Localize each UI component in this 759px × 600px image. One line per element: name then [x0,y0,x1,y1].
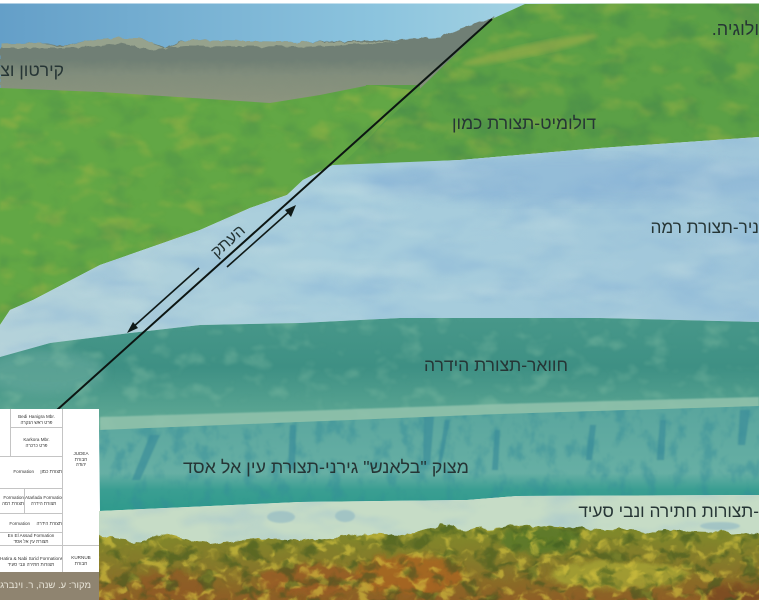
cell: formation 5 [0,556,62,566]
pale strip [100,397,759,432]
layer: marl band [0,315,759,435]
cell: formation 5: Hatira & Nabi Sa'id Formations [0,556,62,561]
cell: member 2 [23,437,50,448]
cell: age upper: חבורת [75,456,87,462]
cell: formation 2a: Formation [3,495,24,500]
label: dolomite formation: דולומיט-תצורת כמון [452,113,596,133]
cell: member 1: פרט ראש הנקרה [21,420,52,424]
layer: cliff band [99,404,759,514]
cell: formation 2b [25,495,62,506]
cell: age upper [73,451,89,467]
layer: pale lower band [99,495,759,544]
layer: green backing along the fault [345,85,420,170]
cell: formation 2a [2,495,24,506]
cell: formation 2a: תצורת רמה [2,500,24,506]
vegetation speckle [99,523,759,600]
arrow: up-right along fault [227,205,296,267]
cell: member 1 [18,414,55,425]
cell: formation 5: תצורות חתירה ונבי סעיד [8,562,54,566]
cell: member 2: Karkora Mbr. [23,437,50,442]
cell: age lower: חבורת [75,560,87,566]
cell: age upper: JUDEA [73,451,89,456]
cell: age lower [71,555,91,566]
label: lower formations: -תצורות חתירה ונבי סעיד [578,501,759,521]
blue spots on pale band [267,510,740,530]
cell: formation 4 [8,533,54,544]
arrow: down-left along fault [127,268,199,333]
cell: formation 4: תצורת עין אל אסד [14,538,48,544]
layer: dolomite left block [0,80,420,330]
cell: age upper: יהודה [76,462,86,467]
vegetation foreground [99,523,759,600]
label: top right note: ולוגיה. [712,19,759,39]
layer: dolomite right block [330,0,759,170]
fault line [57,19,492,410]
cell: member 2: פרט כרכרה [26,442,47,448]
ridge highlights [0,38,400,50]
sky [0,3,759,93]
label: marl formation: חוואר-תצורת הידרה [424,355,568,375]
cell: formation 4: En El Assad Formation [8,533,54,538]
label: limestone formation: ניר-תצורת רמה [651,217,759,237]
cell: formation 1: Formation תצורת כמון [13,469,62,474]
source caption [0,572,99,600]
cell: formation 2b: תצורת הידרה [31,500,56,506]
label: chalk formation: קירטון וצ [0,60,64,80]
label: fault: העתק [208,222,249,261]
cell: member 1: Bedi Hanigra Mbr. [18,414,55,419]
cell: formation 3: Formation תצורת הידרה [9,521,62,526]
label: cliff formation: מצוק "בלאנש" גירני-תצורת עין אל אסד [183,457,469,477]
stratigraphic table [0,409,99,572]
layer: chalk band (grey) [0,17,495,108]
cliff streaks [132,410,750,480]
layer: limestone band (blue) [0,130,759,360]
vegetation patches [135,527,759,600]
top white strip [0,0,759,4]
cell: age lower: KURNUB [71,555,91,560]
